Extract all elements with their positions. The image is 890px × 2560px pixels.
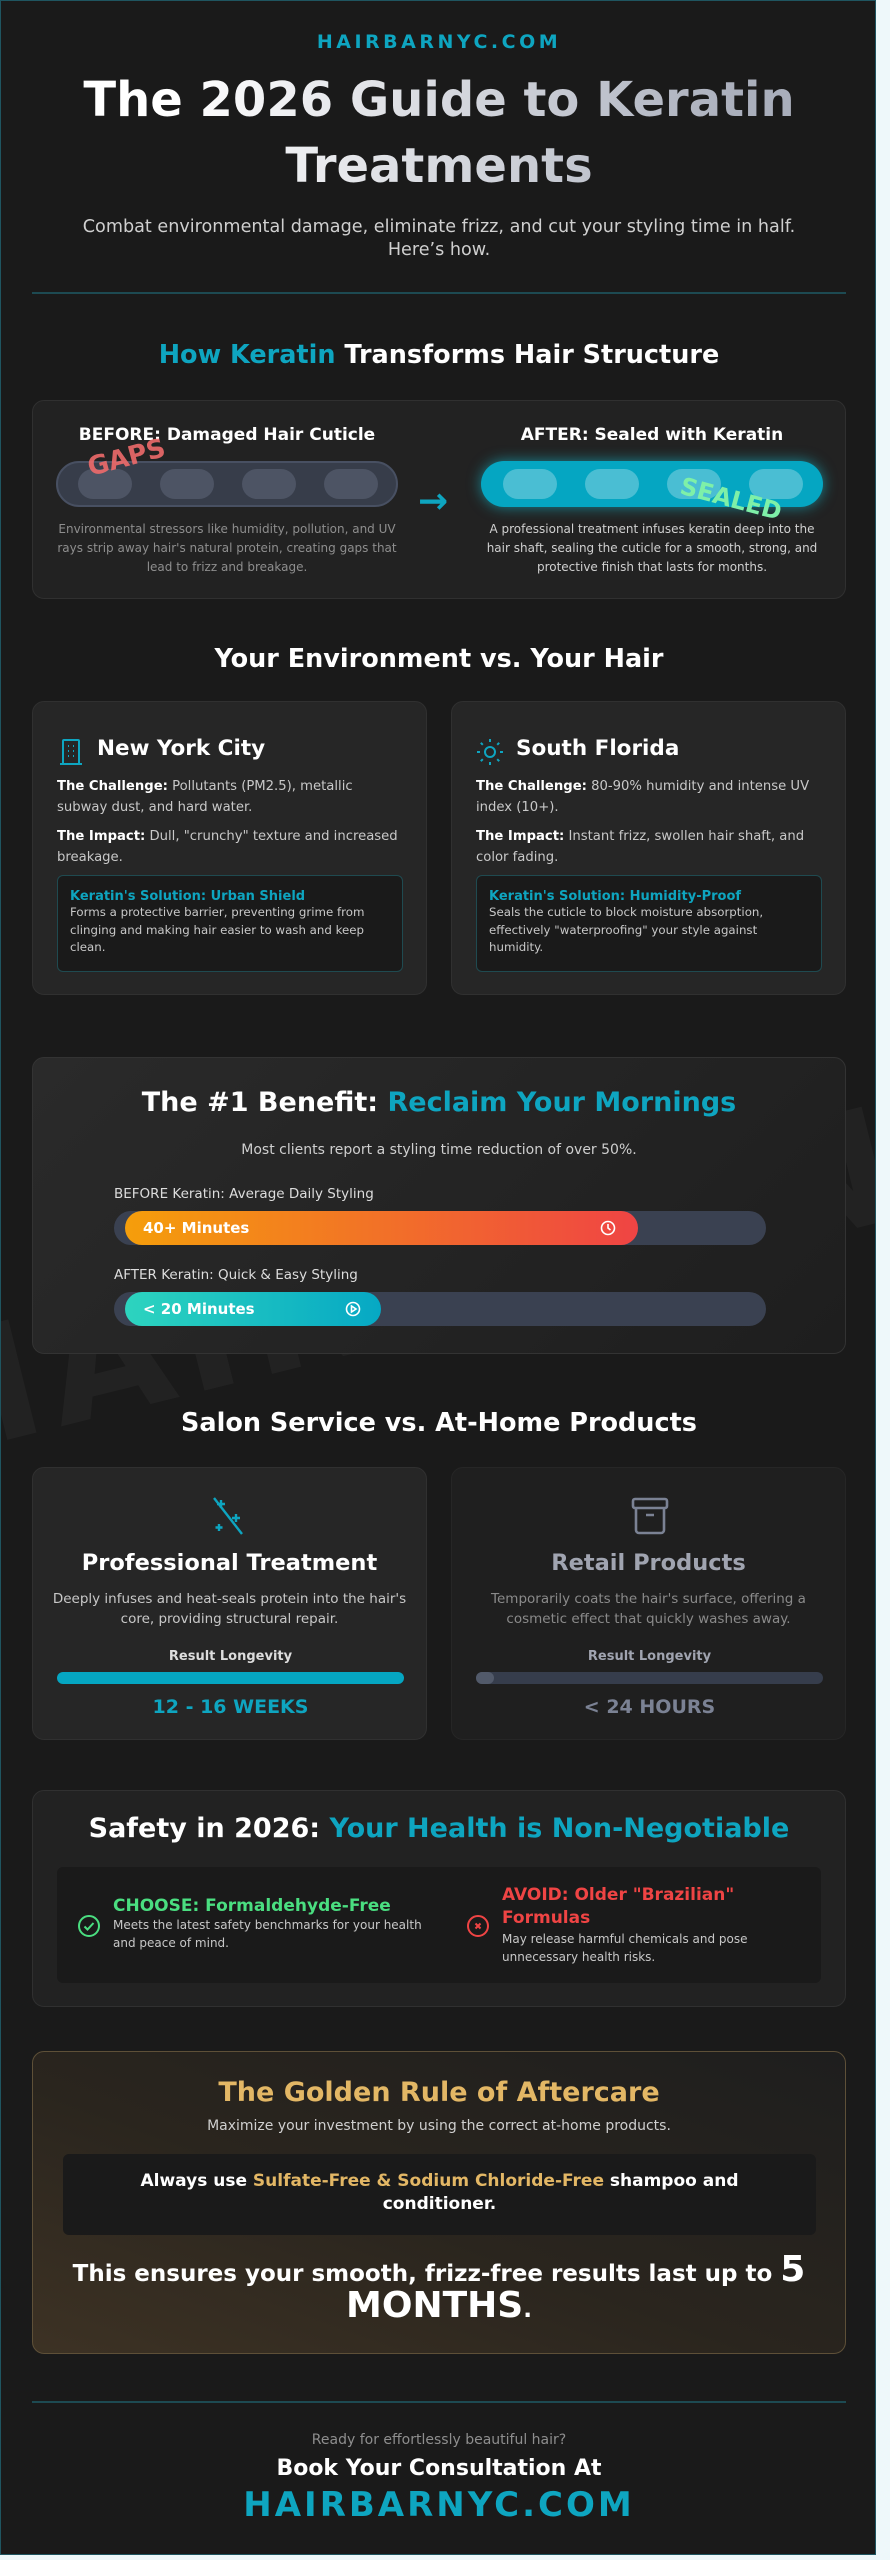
before description: Environmental stressors like humidity, pollution, and UV rays strip away hair's natural protein, creating gaps that lead to frizz and breakage. [57,522,397,574]
florida title: South Florida [516,736,679,761]
florida solution box [476,875,822,972]
heading: salon vs home: Salon Service vs. At-Home Products [181,1408,697,1438]
florida solution box: Keratin's Solution: Humidity-Proof [489,889,741,904]
pro title: Professional Treatment [82,1550,377,1576]
footer CTA: Book Your Consultation At [276,2456,602,2481]
choose text: Meets the latest safety benchmarks for your health and peace of mind. [113,1918,422,1950]
florida text: The Impact: Instant frizz, swollen hair shaft, and color fading. [476,829,804,865]
golden result [72,2249,805,2326]
avoid text: May release harmful chemicals and pose unnecessary health risks. [502,1932,748,1964]
after description: A professional treatment infuses keratin deep into the hair shaft, sealing the cuticle for a smooth, strong, and protective finish that lasts for months. [487,522,817,574]
panel: NYC [32,701,427,995]
subtitle [83,217,795,260]
before pill [56,461,398,507]
florida solution box: Seals the cuticle to block moisture absorption, effectively "waterproofing" your style against humidity. [489,905,763,954]
florida text: The Challenge: 80-90% humidity and intense UV index (10+). [476,779,809,815]
safety title: Safety in 2026: Your Health is Non-Negotiable [89,1813,789,1844]
benefit subtitle: Most clients report a styling time reduction of over 50%. [241,1142,637,1158]
choose text [113,1896,422,1950]
footer CTA: HAIRBARNYC.COM [243,2485,635,2525]
retail longevity bar: < 24 HOURS [584,1696,715,1718]
heading: how keratin: How Keratin Transforms Hair Structure [159,340,719,370]
nyc solution box: Forms a protective barrier, preventing grime from clinging and making hair easier to wash and keep clean. [70,905,364,954]
after bar: < 20 Minutes [143,1300,255,1318]
nyc text [57,779,398,865]
footer CTA [243,2432,635,2525]
after title: AFTER: Sealed with Keratin [521,425,783,445]
retail title: Retail Products [551,1550,746,1576]
before bar [114,1186,766,1245]
GAPS label: GAPS [84,433,169,483]
title [1,67,877,199]
choose text: CHOOSE: Formaldehyde-Free [113,1896,391,1916]
SEALED label: SEALED [677,472,785,526]
nyc solution box: Keratin's Solution: Urban Shield [70,889,305,904]
nyc text: The Challenge: Pollutants (PM2.5), metallic subway dust, and hard water. [57,779,353,815]
golden subtitle: Maximize your investment by using the correct at-home products. [207,2118,671,2134]
avoid text: AVOID: Older "Brazilian" Formulas [502,1885,734,1928]
pro longevity bar: Result Longevity [169,1649,292,1664]
panel: retail [451,1467,846,1740]
after pill [481,461,823,507]
icon: x [467,1915,489,1937]
florida text [476,779,809,865]
panel: safety [32,1790,846,2007]
icon: check [78,1915,100,1937]
golden inner box: conditioner. [383,2194,496,2214]
golden result: MONTHS. [346,2285,532,2326]
icon: wand sparkles [213,1497,243,1535]
icon: archive box [632,1498,668,1534]
arrow: → [418,481,448,522]
avoid text [502,1885,748,1964]
before title: BEFORE: Damaged Hair Cuticle [79,425,375,445]
nyc solution box [57,875,403,972]
before bar: 40+ Minutes [143,1219,249,1237]
retail desc: Temporarily coats the hair's surface, offering a cosmetic effect that quickly washes away. [491,1591,806,1627]
subtitle: Here’s how. [388,240,490,260]
panel: benefit [32,1057,846,1354]
before bar: BEFORE Keratin: Average Daily Styling [114,1186,374,1202]
panel: Florida [451,701,846,995]
pro longevity bar: 12 - 16 WEEKS [153,1696,308,1718]
icon: building [60,739,82,765]
brand label: HAIRBARNYC.COM [317,31,561,53]
golden inner box [63,2154,816,2235]
subtitle: Combat environmental damage, eliminate frizz, and cut your styling time in half. [83,217,795,237]
pro longevity bar [57,1649,404,1718]
after bar: AFTER Keratin: Quick & Easy Styling [114,1267,358,1283]
golden result: This ensures your smooth, frizz-free results last up to 5 [73,2249,805,2290]
panel: professional [32,1467,427,1740]
benefit title: The #1 Benefit: Reclaim Your Mornings [142,1087,736,1118]
safety inner box [57,1867,821,1983]
pro desc: Deeply infuses and heat-seals protein into the hair's core, providing structural repair. [53,1591,406,1627]
panel: golden rule [32,2051,846,2354]
title: The 2026 Guide to Keratin [83,72,795,128]
footer CTA: Ready for effortlessly beautiful hair? [312,2432,566,2448]
retail longevity bar [476,1649,823,1718]
after bar [114,1267,766,1326]
nyc text: The Impact: Dull, "crunchy" texture and increased breakage. [57,829,398,865]
icon: sun [477,739,503,765]
nyc title: New York City [97,736,265,761]
title: Treatments [285,138,593,194]
golden title: The Golden Rule of Aftercare [218,2077,660,2108]
golden inner box: Always use Sulfate-Free & Sodium Chloride-Free shampoo and [140,2171,738,2191]
panel: before/after [32,400,846,599]
retail longevity bar: Result Longevity [588,1649,711,1664]
heading: environment: Your Environment vs. Your Hair [214,644,664,674]
